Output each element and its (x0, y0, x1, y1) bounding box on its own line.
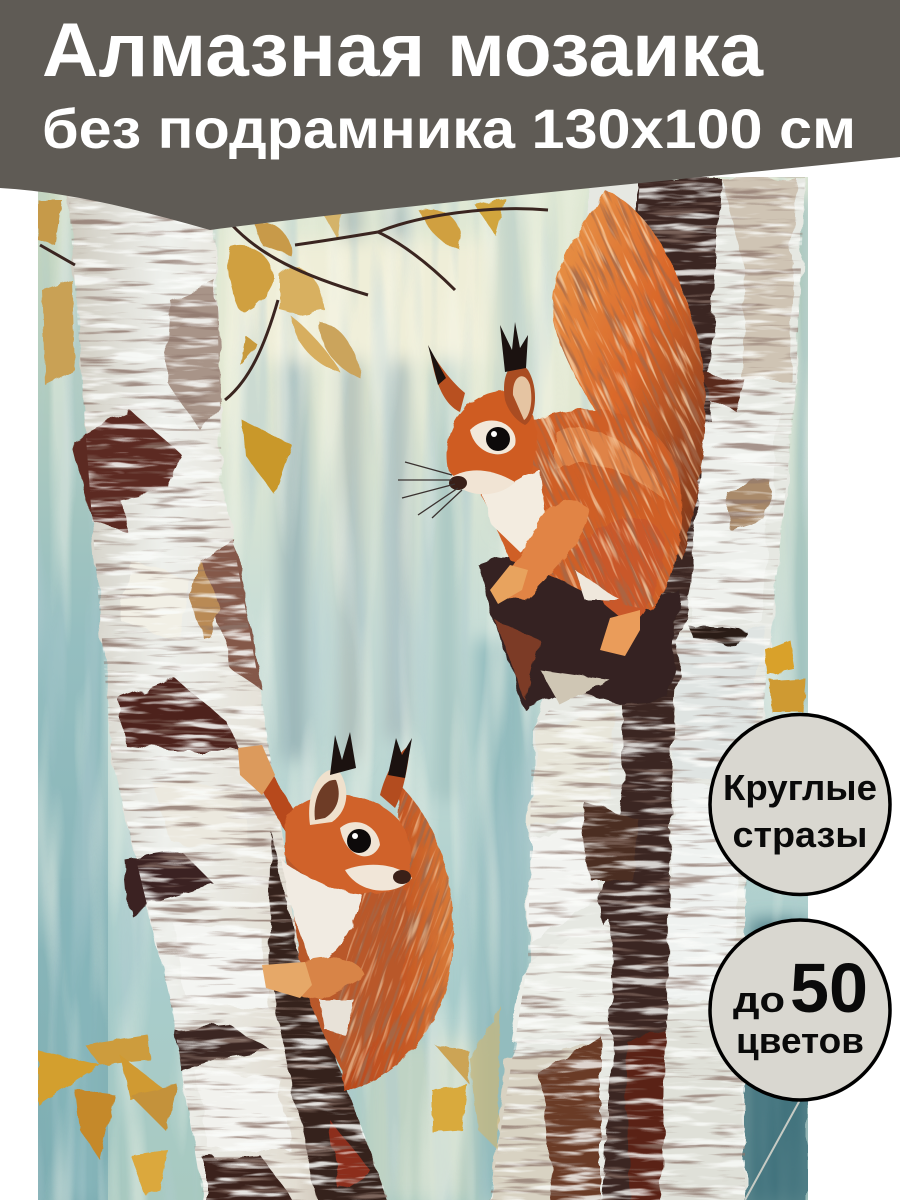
chest (282, 860, 362, 965)
right birch tree (478, 177, 810, 1200)
hind leg (302, 956, 364, 999)
badge: round rhinestones: Круглые (723, 767, 877, 808)
body (285, 850, 408, 1075)
golden leaves and twigs (38, 198, 805, 1200)
front leg (508, 500, 589, 600)
forest background (38, 177, 808, 1200)
right bark texture (480, 177, 810, 1200)
tail (340, 785, 453, 1092)
eye (486, 427, 510, 451)
badge: up to 50 colours: 50 (790, 949, 868, 1027)
ears (504, 364, 535, 425)
paws (238, 745, 275, 795)
bottom squirrel (238, 732, 454, 1091)
left birch trunk (60, 190, 400, 1200)
badge: round rhinestones (710, 714, 890, 894)
fur texture (333, 791, 453, 1090)
nose (393, 870, 411, 884)
badge: up to 50 colours: цветов (736, 1020, 864, 1061)
subtitle: без подрамника 130х100 см (42, 97, 856, 160)
tail (553, 190, 705, 560)
ear tufts (500, 322, 528, 372)
head (446, 391, 537, 487)
header banner (0, 0, 900, 230)
ears (309, 769, 346, 825)
title: Алмазная мозаика (42, 8, 764, 93)
paws (490, 565, 528, 604)
fur texture (533, 190, 705, 610)
branch stump under squirrel (478, 550, 680, 710)
nose (449, 476, 467, 490)
painting: squirrels on birch trees (38, 177, 808, 1200)
eye (347, 829, 371, 853)
bark texture (60, 190, 400, 1200)
badge: up to 50 colours (710, 920, 890, 1100)
ear tufts (330, 732, 356, 775)
chest (482, 470, 548, 552)
badge: round rhinestones: стразы (732, 814, 868, 855)
body (480, 409, 682, 610)
top squirrel (398, 190, 706, 656)
head (285, 795, 411, 894)
badge: up to 50 colours: до (733, 979, 785, 1020)
whiskers (398, 462, 462, 518)
